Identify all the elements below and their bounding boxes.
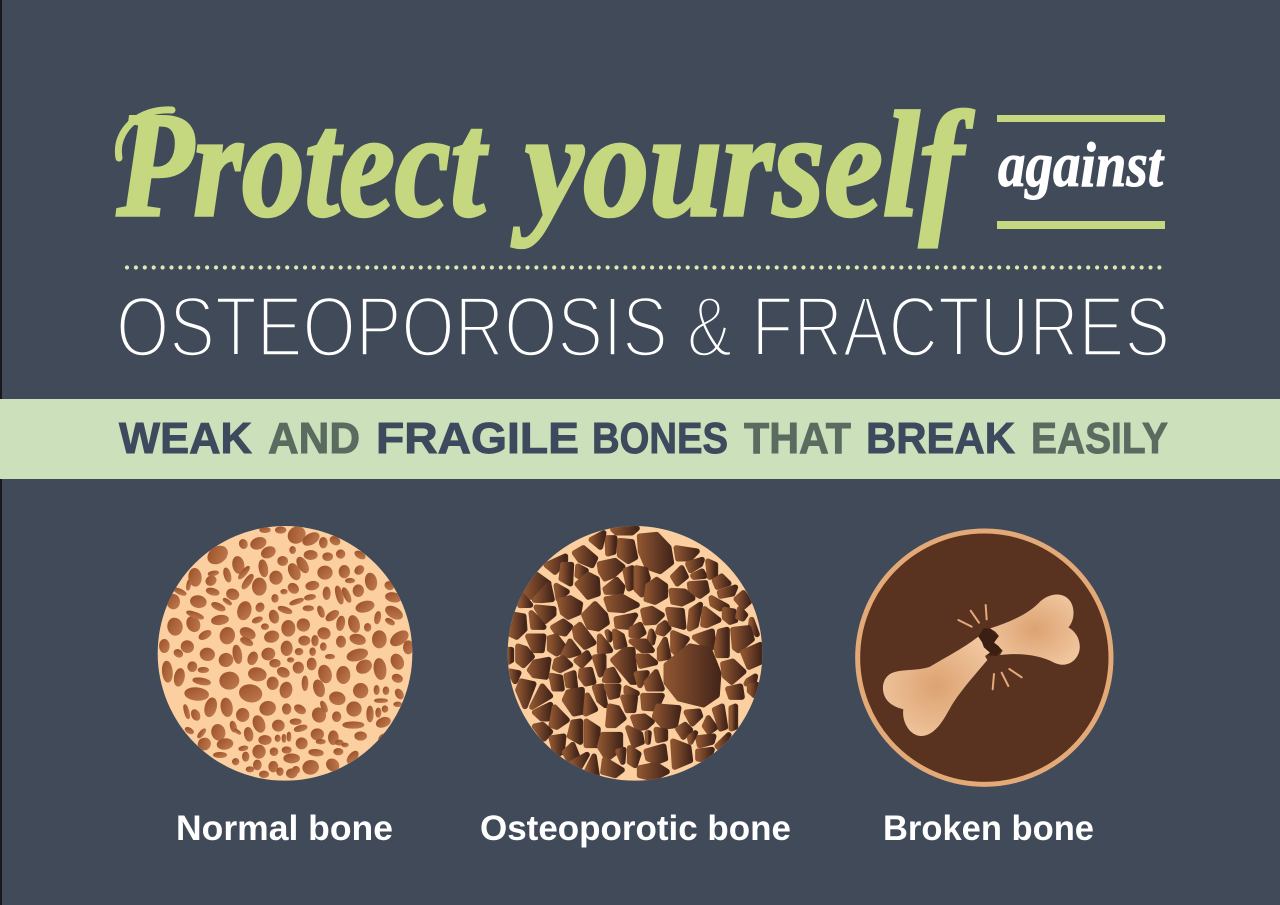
banner: weak and fragile bones: EASILY [1031, 414, 1168, 463]
banner: weak and fragile bones: THAT [744, 414, 851, 463]
banner: weak and fragile bones: BREAK [866, 414, 1015, 463]
bone upper right piece [990, 594, 1080, 665]
subtitle: against with rules [997, 115, 1165, 229]
banner: weak and fragile bones: FRAGILE [376, 414, 579, 463]
icon: broken bone [858, 531, 1111, 784]
fracture gap [978, 628, 1002, 656]
banner: weak and fragile bones [0, 399, 1280, 479]
subtitle: against with rules: against [998, 129, 1165, 200]
title: Protect yourself [116, 82, 974, 248]
label: broken bone: Broken bone [883, 809, 1094, 848]
title: Protect yourself: Protect [116, 82, 489, 248]
title: Protect yourself: yourself [511, 82, 974, 248]
banner: weak and fragile bones: BONES [592, 414, 728, 463]
banner: weak and fragile bones: WEAK [119, 414, 252, 463]
banner: weak and fragile bones: AND [268, 414, 360, 463]
icon: normal bone texture [158, 524, 413, 781]
bone lower left piece [883, 637, 990, 736]
label: normal bone: Normal bone [176, 809, 393, 848]
icon: osteoporotic bone texture [508, 526, 762, 781]
panel: normal bone [158, 524, 413, 848]
panel: osteoporotic bone [480, 526, 791, 848]
panel: broken bone [858, 531, 1111, 848]
label: osteoporotic bone: Osteoporotic bone [480, 809, 791, 848]
crack spark lines [958, 605, 1022, 689]
